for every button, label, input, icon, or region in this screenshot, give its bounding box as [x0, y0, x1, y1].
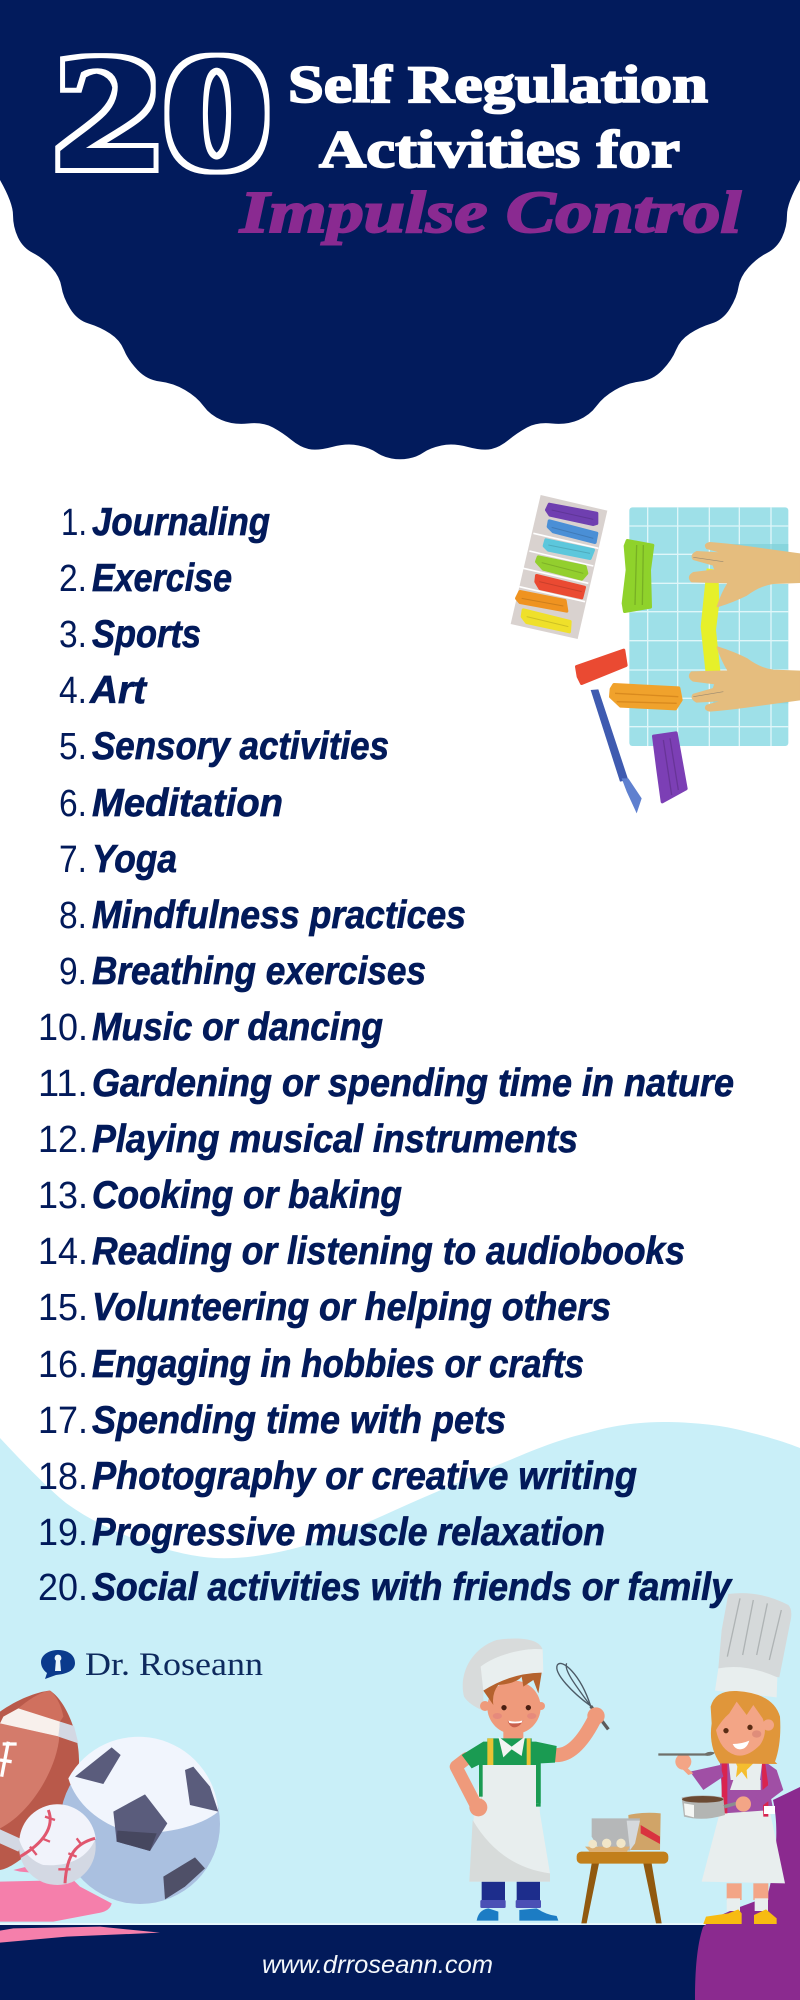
- logo icon: [41, 1650, 75, 1679]
- girl: spoon: [658, 1752, 715, 1756]
- item 1: 1.: [61, 502, 87, 544]
- hands: [690, 543, 800, 711]
- item 20: Social activities with friends or family: [92, 1566, 733, 1609]
- clay tray with strips: [511, 495, 607, 639]
- title: outlined number 20: 20: [52, 23, 272, 203]
- item 1: Journaling: [92, 501, 270, 544]
- girl: legs and shoes: [703, 1883, 777, 1924]
- item 12: 12.: [38, 1119, 88, 1161]
- baseball: [19, 1804, 96, 1885]
- header: scalloped navy banner: [0, 0, 800, 459]
- item 18: Photography or creative writing: [92, 1455, 637, 1498]
- title: [52, 23, 742, 245]
- clay mat: [629, 507, 788, 746]
- title: line one: Self Regulation: [288, 56, 708, 114]
- item 15: 15.: [38, 1287, 88, 1329]
- boy: whisk: [557, 1663, 608, 1729]
- girl: hat: [718, 1593, 791, 1677]
- item 6: 6.: [59, 783, 87, 825]
- boy: upper body: [456, 1638, 608, 1816]
- item 19: 19.: [38, 1512, 88, 1554]
- item 13: Cooking or baking: [92, 1174, 402, 1217]
- item 6: Meditation: [92, 782, 283, 825]
- item 2: 2.: [59, 558, 87, 600]
- item 4: [59, 669, 148, 712]
- logo wordmark: Dr. Roseann: [85, 1647, 263, 1683]
- girl: apron: [702, 1780, 785, 1883]
- item 3: [59, 613, 201, 656]
- soccer ball: [60, 1737, 220, 1904]
- girl: pot: [682, 1795, 725, 1819]
- website url: www.drroseann.com: [262, 1951, 493, 1979]
- football: [0, 1691, 79, 1870]
- illustration: modelling clay and hands: [511, 495, 800, 813]
- item 13: 13.: [38, 1175, 88, 1217]
- girl: upper body: [658, 1593, 791, 1819]
- boy: apron lower: [469, 1765, 550, 1882]
- boy: hat: [463, 1638, 543, 1711]
- item 4: 4.: [59, 670, 87, 712]
- item 7: Yoga: [92, 838, 177, 881]
- clay pieces: [577, 541, 686, 802]
- table with bowl, eggs and flour: [577, 1813, 668, 1923]
- chef girl: [658, 1593, 791, 1924]
- item 7: [59, 838, 177, 881]
- title: impulse control: Impulse Control: [239, 179, 742, 245]
- item 20: 20.: [38, 1567, 88, 1609]
- pink brush strokes: [0, 1865, 160, 1943]
- item 3: 3.: [59, 614, 87, 656]
- purple corner blob: [695, 1787, 800, 2000]
- item 11: Gardening or spending time in nature: [92, 1062, 734, 1105]
- footer bar: [0, 1924, 800, 2000]
- item 18: 18.: [38, 1456, 88, 1498]
- illustration: chef boy and table: [456, 1593, 791, 1924]
- item 5: 5.: [59, 726, 87, 768]
- item 16: Engaging in hobbies or crafts: [92, 1343, 584, 1386]
- item 5: Sensory activities: [92, 725, 389, 768]
- title: line two: Activities for: [319, 121, 680, 179]
- item 4: Art: [89, 669, 148, 712]
- item 19: Progressive muscle relaxation: [92, 1511, 605, 1554]
- yellow clay roll: [701, 568, 722, 683]
- item 17: 17.: [38, 1400, 88, 1442]
- activity list: [38, 501, 734, 1609]
- illustration: sports balls: [0, 1691, 220, 1943]
- item 3: Sports: [92, 613, 201, 656]
- item 11: 11.: [38, 1063, 88, 1105]
- item 10: Music or dancing: [92, 1006, 383, 1049]
- item 15: Volunteering or helping others: [92, 1286, 611, 1329]
- boy: head: [480, 1701, 490, 1711]
- item 9: Breathing exercises: [92, 950, 426, 993]
- sculpting tool: [591, 689, 642, 813]
- girl: head and hair: [711, 1691, 780, 1764]
- item 16: 16.: [38, 1344, 88, 1386]
- item 2: Exercise: [92, 557, 232, 600]
- item 14: 14.: [38, 1231, 88, 1273]
- item 12: Playing musical instruments: [92, 1118, 578, 1161]
- logo: Dr. Roseann: [41, 1647, 263, 1683]
- item 9: 9.: [59, 951, 87, 993]
- boy: legs and shoes: [477, 1882, 558, 1921]
- item 14: Reading or listening to audiobooks: [92, 1230, 685, 1273]
- item 17: Spending time with pets: [92, 1399, 506, 1442]
- item 8: 8.: [59, 895, 87, 937]
- background: light blue wave: [0, 1422, 800, 2000]
- item 10: 10.: [38, 1007, 88, 1049]
- item 8: Mindfulness practices: [92, 894, 466, 937]
- item 7: 7.: [59, 839, 87, 881]
